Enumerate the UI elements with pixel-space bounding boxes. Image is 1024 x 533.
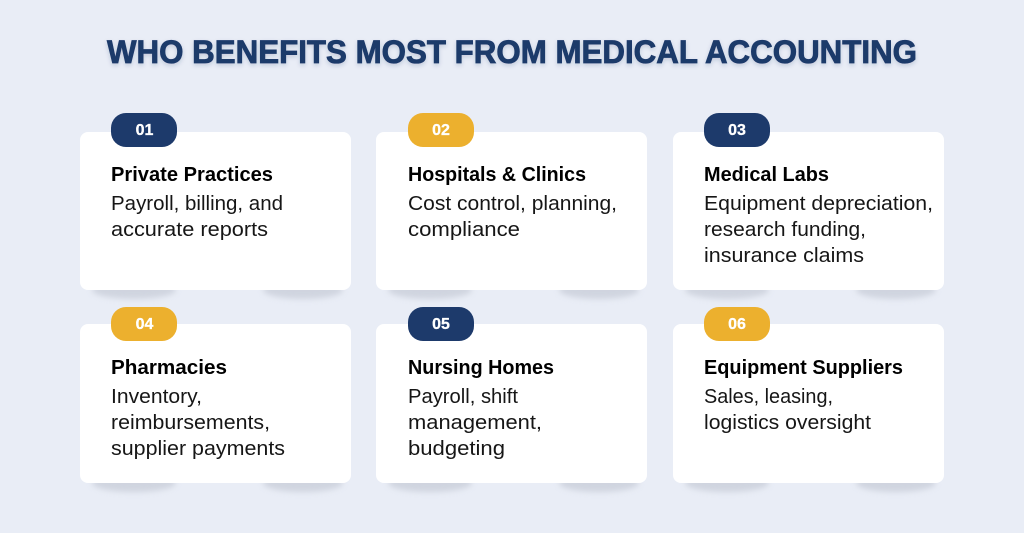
badge 01: 01 [136, 122, 154, 139]
badge 02: 02 [432, 122, 450, 139]
panel: nursing homes [376, 307, 647, 492]
heading: equipment suppliers: Equipment Suppliers [704, 357, 903, 379]
text: medical labs description: research funding, [704, 219, 866, 241]
text: medical labs description: insurance claims [704, 245, 864, 267]
text: private practices description: accurate reports [111, 219, 268, 241]
text: pharmacies description: Inventory, [111, 386, 202, 408]
text: equipment suppliers description: Sales, leasing, [704, 386, 833, 408]
text: medical labs description: Equipment depreciation, [704, 193, 933, 215]
badge 03 [704, 113, 770, 147]
text: hospitals and clinics description: Cost control, planning, [408, 193, 617, 215]
badge 04: 04 [136, 316, 154, 333]
text: nursing homes description: management, [408, 412, 542, 434]
badge 03: 03 [728, 122, 746, 139]
text: equipment suppliers description: logistics oversight [704, 412, 871, 434]
text: medical labs description [704, 193, 933, 267]
text: equipment suppliers description [704, 386, 871, 434]
title: WHO BENEFITS MOST FROM MEDICAL ACCOUNTING [107, 34, 917, 70]
text: private practices description [111, 193, 283, 241]
text: nursing homes description: Payroll, shift [408, 386, 518, 408]
heading: private practices: Private Practices [111, 164, 273, 186]
panel: equipment suppliers [673, 307, 944, 492]
badge 05 [408, 307, 474, 341]
heading: nursing homes: Nursing Homes [408, 357, 554, 379]
text: private practices description: Payroll, billing, and [111, 193, 283, 215]
badge 04 [111, 307, 177, 341]
badge 01 [111, 113, 177, 147]
text: nursing homes description: budgeting [408, 438, 505, 460]
heading: hospitals and clinics: Hospitals & Clinics [408, 164, 586, 186]
text: nursing homes description [408, 386, 542, 460]
badge 06: 06 [728, 316, 746, 333]
panel: hospitals and clinics [376, 113, 647, 299]
text: hospitals and clinics description: compliance [408, 219, 520, 241]
text: pharmacies description: reimbursements, [111, 412, 270, 434]
text: pharmacies description [111, 386, 285, 460]
text: pharmacies description: supplier payments [111, 438, 285, 460]
text: hospitals and clinics description [408, 193, 617, 241]
panel: private practices [80, 113, 351, 299]
panel: medical labs [673, 113, 944, 299]
heading: medical labs: Medical Labs [704, 164, 829, 186]
badge 05: 05 [432, 316, 450, 333]
heading: pharmacies: Pharmacies [111, 357, 227, 379]
badge 02 [408, 113, 474, 147]
panel: pharmacies [80, 307, 351, 492]
badge 06 [704, 307, 770, 341]
